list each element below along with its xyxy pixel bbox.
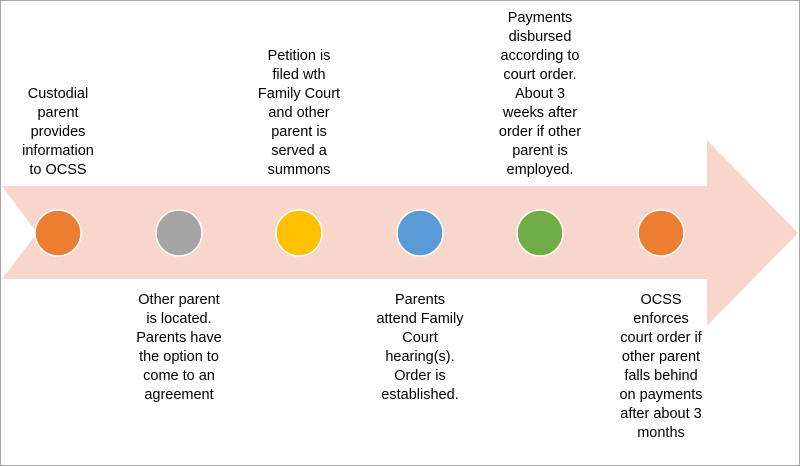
text: step 4: Order is: [394, 368, 446, 384]
text: step 2: Other parent: [138, 292, 220, 308]
text: step 6: falls behind: [624, 368, 698, 384]
circle: step 2: [156, 210, 202, 256]
text: step 3: Family Court: [258, 86, 340, 102]
text: step 5: Payments: [508, 10, 572, 26]
text: step 2: agreement: [144, 387, 214, 403]
text: step 1: Custodial: [28, 86, 88, 102]
text: step 3: summons: [268, 162, 330, 178]
text: step 6: [619, 292, 703, 441]
text: step 3: served a: [271, 143, 327, 159]
text: step 6: after about 3: [620, 406, 702, 422]
text: step 5: court order.: [503, 67, 577, 83]
text: step 6: enforces: [633, 311, 689, 327]
text: step 2: Parents have: [136, 330, 222, 346]
arrow: [2, 140, 798, 326]
text: step 5: according to: [500, 48, 580, 64]
text: step 2: the option to: [139, 349, 219, 365]
text: step 5: [499, 10, 581, 178]
circle: step 5: [517, 210, 563, 256]
text: step 4: Parents: [395, 292, 445, 308]
text: step 1: [22, 86, 94, 178]
text: step 3: parent is: [271, 124, 327, 140]
text: step 3: and other: [268, 105, 330, 121]
circle: step 3: [276, 210, 322, 256]
text: step 3: [258, 48, 340, 178]
text: step 5: About 3: [515, 86, 565, 102]
text: step 2: come to an: [143, 368, 215, 384]
text: step 4: [376, 292, 464, 403]
text: step 4: hearing(s).: [385, 349, 455, 365]
text: step 6: court order if: [620, 330, 702, 346]
text: step 5: disbursed: [509, 29, 571, 45]
text: step 4: Court: [402, 330, 438, 346]
text: step 3: Petition is: [268, 48, 330, 64]
text: step 5: parent is: [512, 143, 568, 159]
text: step 6: OCSS: [640, 292, 682, 308]
text: step 1: information: [22, 143, 94, 159]
text: step 5: weeks after: [503, 105, 577, 121]
text: step 2: [136, 292, 222, 403]
text: step 6: on payments: [619, 387, 703, 403]
circle: step 4: [397, 210, 443, 256]
text: step 6: months: [637, 425, 685, 441]
text: step 4: attend Family: [376, 311, 464, 327]
text: step 3: filed wth: [272, 67, 326, 83]
text: step 1: provides: [31, 124, 85, 140]
text: step 5: order if other: [499, 124, 581, 140]
text: step 5: employed.: [507, 162, 573, 178]
circle: step 1: [35, 210, 81, 256]
text: step 4: established.: [381, 387, 459, 403]
circle: step 6: [638, 210, 684, 256]
text: step 6: other parent: [622, 349, 700, 365]
text: step 2: is located.: [146, 311, 212, 327]
text: step 1: to OCSS: [29, 162, 87, 178]
text: step 1: parent: [37, 105, 79, 121]
